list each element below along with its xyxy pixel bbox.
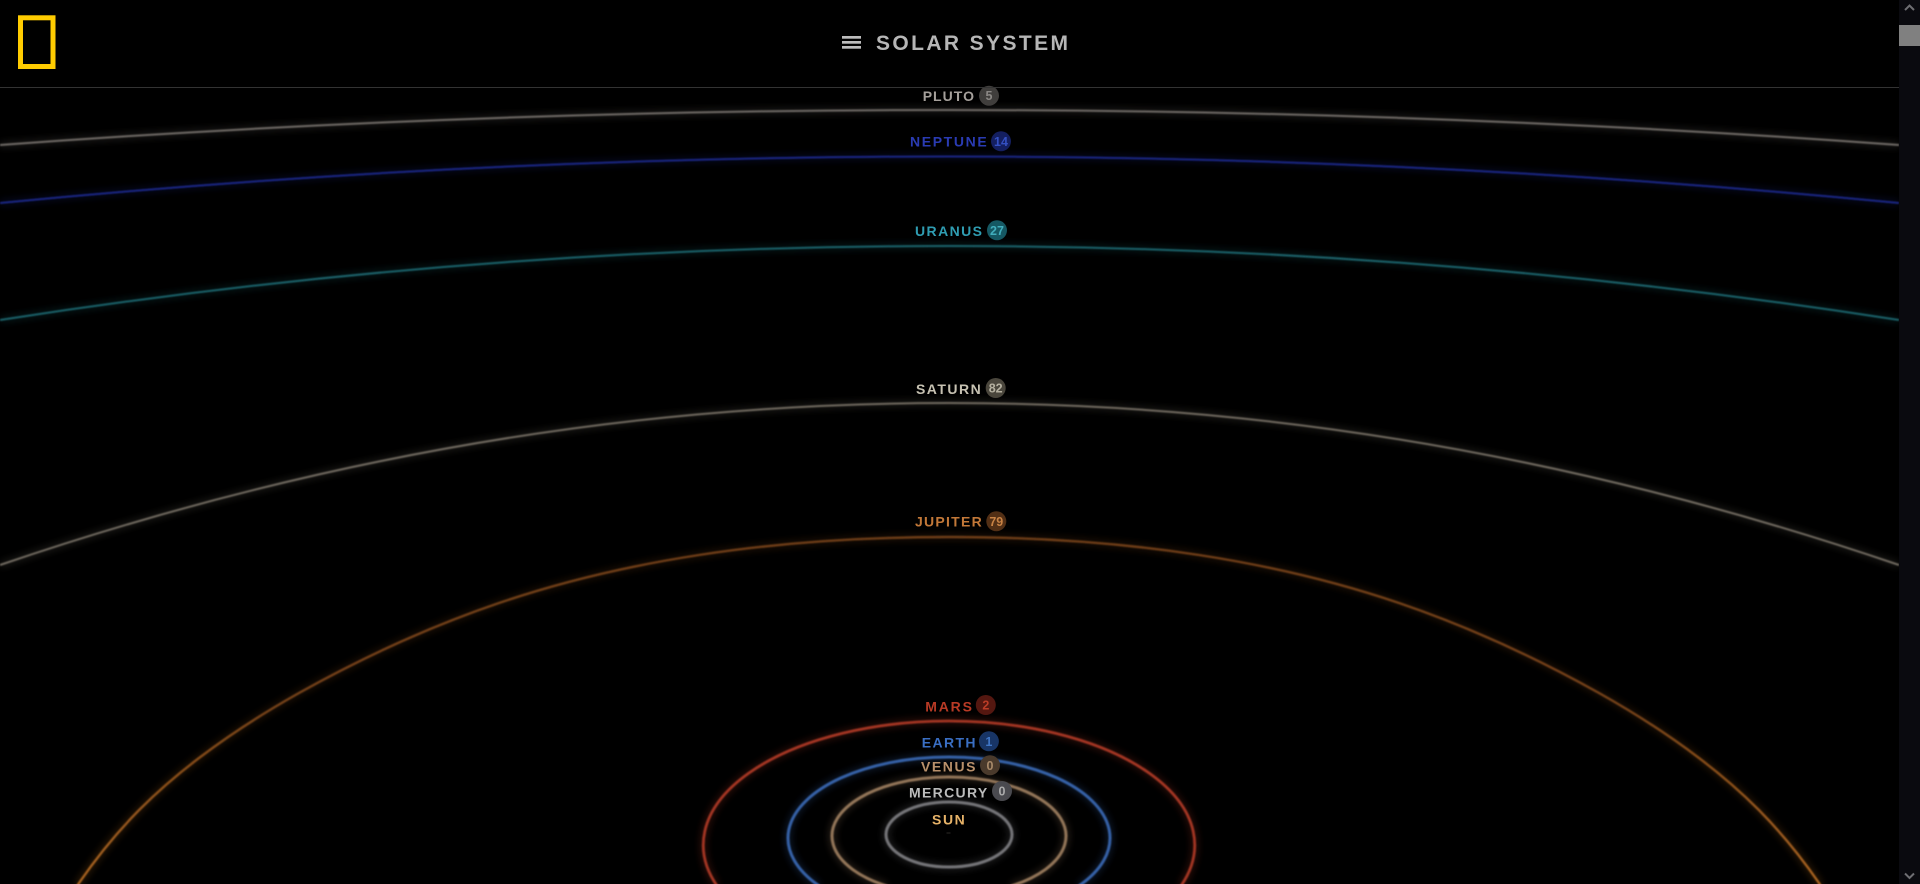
orbit: Earth (788, 757, 1110, 884)
label: Jupiter with moon count: 79 (989, 515, 1003, 529)
icon: yellow logo frame (20, 18, 53, 66)
label: Saturn with moon count: 82 (989, 382, 1003, 396)
label: Earth with moon count (922, 731, 999, 751)
label: Sun: SUN (932, 811, 965, 827)
icon: menu (842, 36, 861, 49)
icon: scroll up arrow (1905, 6, 1914, 10)
label: Mercury with moon count (909, 781, 1012, 801)
scrollbar (1899, 0, 1920, 884)
label: Saturn with moon count (916, 378, 1006, 398)
label: Neptune with moon count: 14 (994, 135, 1008, 149)
label: Mars with moon count: 2 (982, 698, 989, 712)
label: Pluto with moon count: 5 (986, 89, 993, 103)
label: Mercury with moon count: MERCURY (909, 784, 988, 800)
label: Venus with moon count (921, 755, 1000, 775)
label: Uranus with moon count (915, 220, 1007, 240)
label: Pluto with moon count: PLUTO (923, 88, 974, 104)
label: Uranus with moon count: 27 (990, 224, 1004, 238)
label: Neptune with moon count (910, 131, 1011, 151)
sun marker (946, 832, 950, 834)
label: Uranus with moon count: URANUS (915, 223, 982, 239)
label: Mercury with moon count: 0 (999, 784, 1006, 798)
orbit: Uranus (0, 246, 1899, 320)
label: Earth with moon count: EARTH (922, 734, 976, 750)
label: Neptune with moon count: NEPTUNE (910, 134, 987, 150)
orbit: Saturn (0, 403, 1899, 565)
label: Earth with moon count: 1 (985, 735, 992, 749)
label: Venus with moon count: VENUS (921, 759, 976, 775)
label: Saturn with moon count: SATURN (916, 381, 981, 397)
orbit: Pluto (0, 110, 1899, 145)
title: SOLAR SYSTEM (876, 32, 1068, 55)
scrollbar thumb (1899, 25, 1920, 46)
icon: scroll down arrow (1905, 874, 1914, 878)
orbit: Venus (832, 777, 1066, 884)
label: Pluto with moon count (923, 86, 999, 106)
label: Mars with moon count (925, 695, 996, 715)
header divider (0, 87, 1899, 88)
orbit: Mercury (886, 802, 1012, 867)
label: Venus with moon count: 0 (987, 759, 994, 773)
orbit: Neptune (0, 156, 1899, 203)
header (0, 18, 1899, 88)
label: Jupiter with moon count: JUPITER (915, 514, 982, 530)
orbit: Jupiter (77, 537, 1821, 884)
label: Jupiter with moon count (915, 511, 1006, 531)
label: Mars with moon count: MARS (925, 699, 972, 715)
orbit: Mars (703, 721, 1195, 884)
